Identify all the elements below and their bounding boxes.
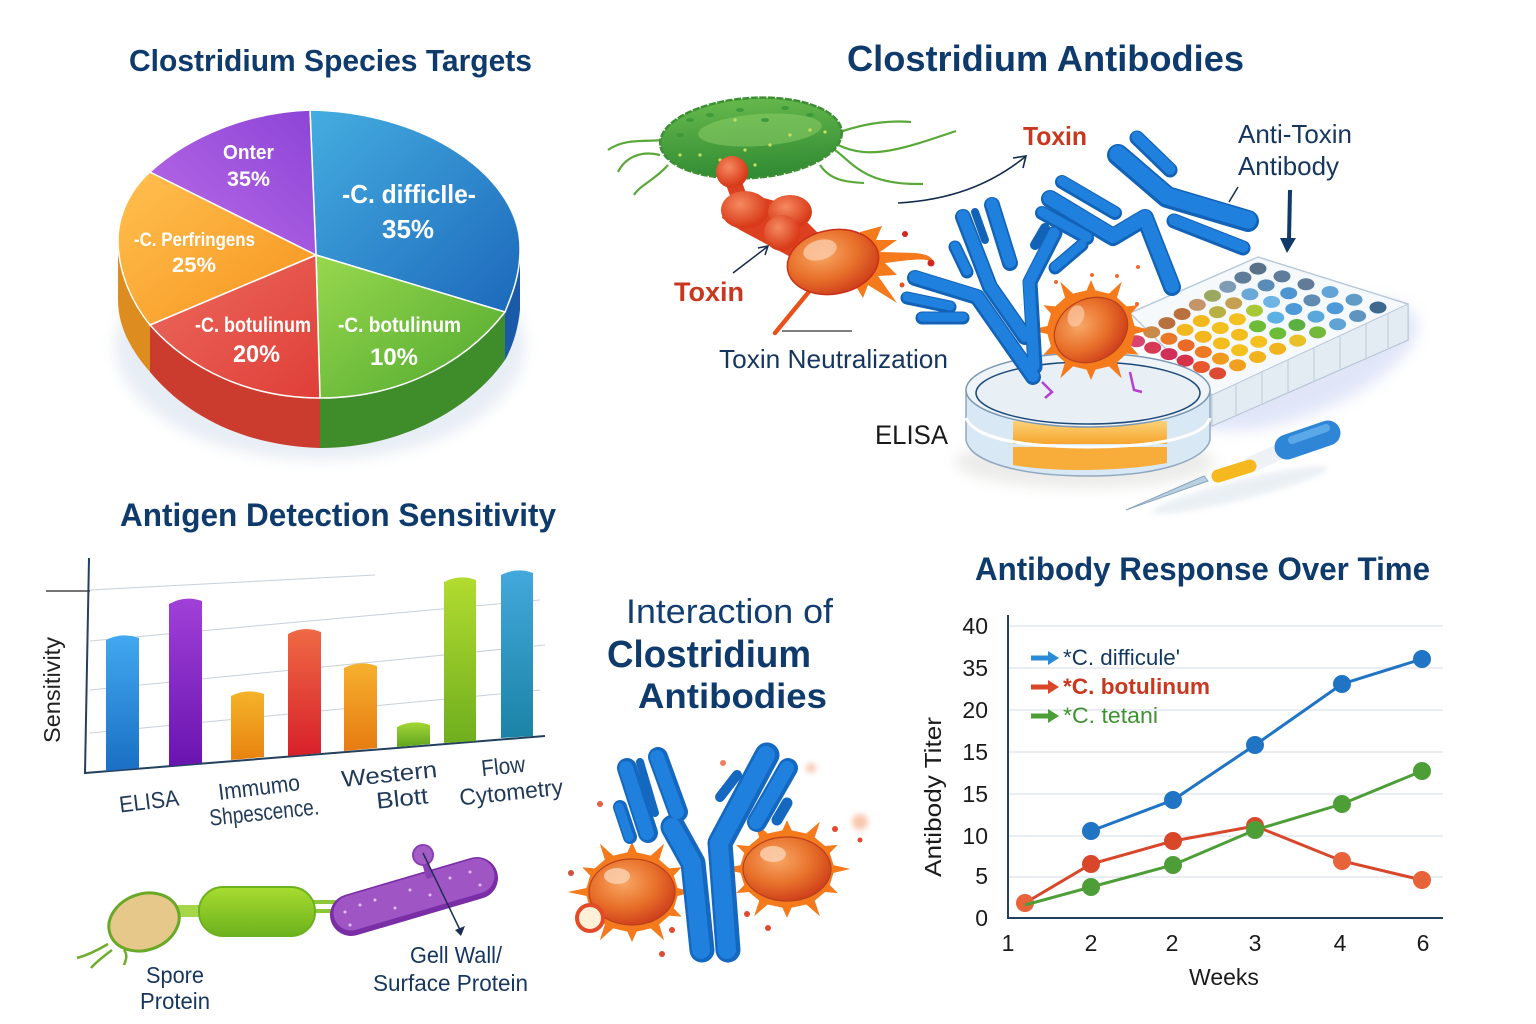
category labels: ELISA (118, 784, 181, 818)
pie labels: -C. Perfringens (134, 230, 255, 251)
illustration: petri dish (955, 353, 1215, 488)
y axis tick labels: 40 (962, 613, 988, 639)
y axis tick labels: 5 (975, 863, 988, 889)
pie labels: 35% (382, 214, 434, 244)
label: Toxin (left): Toxin (674, 277, 744, 307)
slice: C. botulinum 10% (316, 255, 505, 398)
right toxin cell (720, 760, 868, 931)
legend (1031, 645, 1210, 728)
title: Antibody Response Over Time: Antibody Response Over Time (975, 551, 1430, 587)
label: Spore Protein: Spore (146, 962, 204, 988)
pie labels: 35% (227, 168, 270, 191)
arrow: toxin pointer (733, 246, 768, 273)
heading: Interaction of Clostridium Antibodies: Antibodies (638, 677, 827, 716)
category labels: Immumo (217, 769, 301, 805)
series: C. botulinum (1016, 817, 1431, 912)
pie labels: -C. botulinum (338, 314, 461, 337)
pie labels: 20% (233, 341, 280, 368)
label: Toxin (right): Toxin (1023, 121, 1087, 151)
illustration: spore, cell and surface protein (77, 845, 482, 968)
title: Clostridium Antibodies: Clostridium Antibodies (847, 38, 1244, 79)
illustration: blue antibodies (907, 137, 1248, 377)
label: Cell Wall / Surface Protein (373, 942, 528, 996)
y axis tick labels: 0 (975, 905, 988, 931)
legend: *C. difficule' (1063, 645, 1180, 670)
bar chart: detection sensitivity (39, 558, 565, 831)
label: Spore Protein (140, 962, 210, 1014)
heading: Interaction of Clostridium Antibodies: Interaction of (626, 593, 834, 631)
category labels: Flow (480, 751, 527, 781)
slice: other (150, 110, 316, 255)
label: Spore Protein: Protein (140, 988, 210, 1014)
category labels: Blott (375, 782, 430, 814)
illustration: orange toxin cell on dish (1029, 265, 1150, 398)
illustration: bacterium with flagella (608, 92, 956, 195)
category labels: Shpescence. (208, 793, 320, 831)
illustration: toxin chain (716, 156, 934, 333)
antibody (619, 755, 788, 950)
label: Anti-Toxin Antibody (1238, 119, 1352, 181)
label: Toxin Neutralization: Toxin Neutralization (719, 344, 948, 374)
x axis tick labels: 2 (1085, 930, 1097, 956)
pie labels: 10% (370, 344, 418, 371)
illustration: microplate (1128, 257, 1435, 458)
category labels (118, 751, 565, 831)
pie labels: -C. botulinum (195, 314, 311, 337)
x axis tick labels (1002, 930, 1429, 956)
x axis tick labels: 4 (1334, 930, 1347, 956)
axis label: Weeks: Weeks (1189, 964, 1259, 990)
pie labels (134, 142, 476, 371)
slice: C. perfringens (118, 172, 316, 325)
x axis tick labels: 3 (1249, 930, 1261, 956)
y axis tick labels: 15 (962, 739, 988, 765)
illustration: antibody binding two toxins (568, 755, 868, 957)
series: C. difficile (1082, 650, 1431, 840)
heading: Interaction of Clostridium Antibodies: Clostridium (607, 634, 811, 676)
title: Clostridium Species Targets: Clostridium Species Targets (129, 43, 532, 78)
plate wells (1128, 263, 1386, 379)
heading: Interaction of Clostridium Antibodies (607, 593, 834, 716)
left toxin cell (568, 801, 694, 957)
label: Anti-Toxin Antibody: Anti-Toxin (1238, 119, 1352, 149)
x axis tick labels: 1 (1002, 930, 1014, 956)
axis label: Sensitivity: Sensitivity (39, 637, 65, 743)
y axis tick labels: 35 (962, 655, 988, 681)
series: C. tetani (1025, 762, 1431, 905)
pie labels: -C. difficIle- (342, 179, 476, 209)
x axis tick labels: 2 (1166, 930, 1178, 956)
label: ELISA: ELISA (875, 420, 948, 450)
label: Cell Wall / Surface Protein: Gell Wall/ (410, 942, 503, 968)
label: Anti-Toxin Antibody: Antibody (1238, 151, 1339, 181)
y axis tick labels: 20 (962, 697, 988, 723)
label: Cell Wall / Surface Protein: Surface Protein (373, 970, 528, 996)
category labels: Western (340, 756, 438, 792)
bars (106, 570, 533, 771)
category labels: Cytometry (458, 774, 565, 810)
y axis tick labels: 10 (962, 823, 988, 849)
y axis tick labels: 15 (962, 781, 988, 807)
slice: C. botulinum 20% (150, 255, 320, 398)
pie chart: species targets (115, 110, 525, 460)
title: Antigen Detection Sensitivity: Antigen Detection Sensitivity (120, 497, 556, 533)
legend: *C. tetani (1063, 703, 1158, 728)
line chart: antibody response (920, 613, 1443, 990)
x axis tick labels: 6 (1417, 930, 1429, 956)
slice: C. difficile (310, 110, 520, 312)
pie labels: Onter (223, 142, 274, 164)
y axis tick labels (962, 613, 988, 931)
divider line under toxin (782, 330, 852, 332)
legend: *C. botulinum (1063, 674, 1210, 699)
arrow: curved to toxin (898, 156, 1026, 203)
arrow: antibody pointers (1229, 187, 1296, 253)
illustration: pipette (1126, 428, 1330, 521)
pie labels: 25% (172, 254, 216, 277)
axis label: Antibody Titer: Antibody Titer (920, 717, 946, 877)
